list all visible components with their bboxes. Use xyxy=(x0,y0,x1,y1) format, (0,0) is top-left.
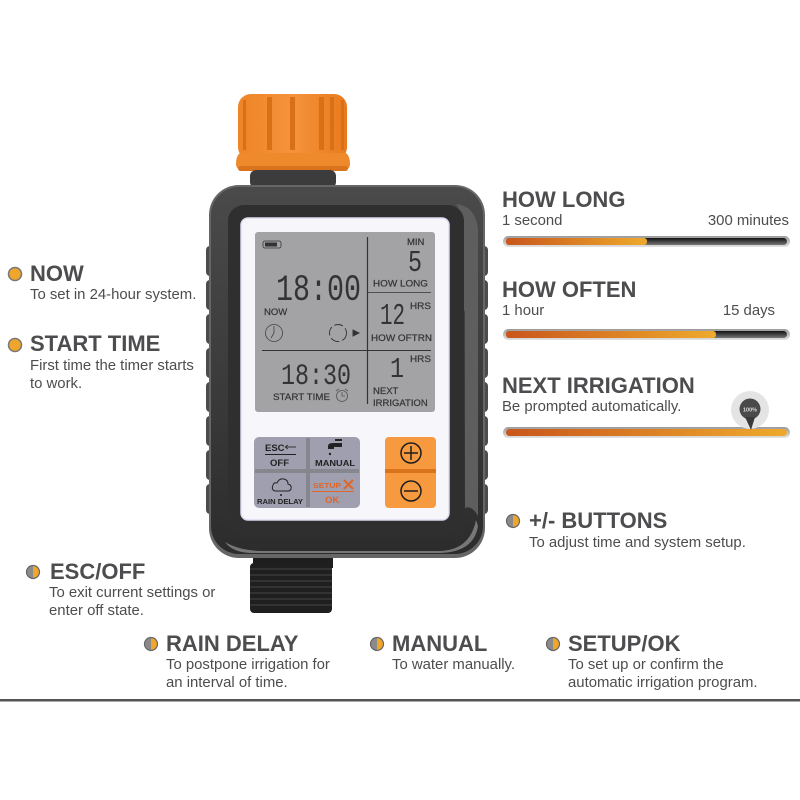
now description: To set in 24-hour system. xyxy=(30,287,196,303)
bullet xyxy=(370,638,384,650)
setup ok heading: SETUP/OK xyxy=(568,631,681,656)
setup ok button: OK xyxy=(325,495,339,506)
setup ok description: automatic irrigation program. xyxy=(568,675,758,691)
esc off description: To exit current settings or xyxy=(49,585,215,601)
callout: manual xyxy=(370,631,515,673)
hrs label 2: HRS xyxy=(410,354,431,365)
rain delay button: RAIN DELAY xyxy=(257,497,303,506)
bullet xyxy=(26,566,40,578)
bullet xyxy=(144,638,158,650)
panel: how long xyxy=(502,187,790,247)
how long range max: 300 minutes xyxy=(708,213,789,229)
next irrigation description: Be prompted automatically. xyxy=(502,399,681,415)
minus icon xyxy=(401,481,421,501)
min label: MIN xyxy=(407,237,425,248)
side grips xyxy=(206,246,488,514)
next irrigation digit: 1 xyxy=(390,353,404,386)
esc off heading: ESC/OFF xyxy=(50,559,145,584)
how often range max: 15 days xyxy=(723,303,775,319)
rain delay description: To postpone irrigation for xyxy=(166,657,330,673)
start time heading: START TIME xyxy=(30,331,160,356)
battery icon xyxy=(263,241,281,248)
device: irrigation timer xyxy=(206,94,488,613)
how often bar xyxy=(503,329,790,340)
esc off button: OFF xyxy=(270,458,289,469)
plus minus heading: +/- BUTTONS xyxy=(529,508,667,533)
start time label: START TIME xyxy=(273,392,330,403)
how long bar xyxy=(503,236,790,247)
esc off description: enter off state. xyxy=(49,603,144,619)
hrs label: HRS xyxy=(410,301,431,312)
callout: start time xyxy=(8,331,194,392)
orange cap xyxy=(236,94,350,171)
progress pin 100%: 100% xyxy=(743,408,757,414)
how often range min: 1 hour xyxy=(502,303,544,319)
how long label: HOW LONG xyxy=(373,278,428,290)
alarm icon xyxy=(336,389,348,402)
threaded outlet xyxy=(250,552,333,613)
cycle icon xyxy=(330,324,359,342)
start time description: to work. xyxy=(30,376,82,392)
start time description: First time the timer starts xyxy=(30,358,194,374)
current time digits: 18:00 xyxy=(276,270,361,312)
setup ok description: To set up or confirm the xyxy=(568,657,724,673)
now heading: NOW xyxy=(30,261,84,286)
progress pin 100% xyxy=(731,391,769,430)
bullet xyxy=(8,268,22,280)
panel: how often xyxy=(502,277,790,340)
panel: next irrigation xyxy=(502,373,790,438)
dark neck xyxy=(250,170,336,188)
manual description: To water manually. xyxy=(392,657,515,673)
setup ok button xyxy=(312,480,354,506)
white face plate xyxy=(241,218,449,520)
function button pad xyxy=(254,437,360,508)
setup ok button: SETUP xyxy=(313,481,341,490)
clock icon xyxy=(266,324,282,342)
callout: rain delay xyxy=(144,631,330,691)
rain delay description: an interval of time. xyxy=(166,675,288,691)
plus and minus buttons xyxy=(385,437,436,508)
how long heading: HOW LONG xyxy=(502,187,625,212)
how long range min: 1 second xyxy=(502,213,562,229)
plus icon xyxy=(401,443,421,463)
esc off button: ESC xyxy=(265,443,285,454)
manual heading: MANUAL xyxy=(392,631,487,656)
bullet xyxy=(8,338,22,352)
LCD screen xyxy=(255,232,435,412)
how often heading: HOW OFTEN xyxy=(502,277,636,302)
next irrigation label: NEXT xyxy=(373,386,399,397)
how long digit: 5 xyxy=(408,246,422,281)
callout: plus minus buttons xyxy=(506,508,746,551)
next irrigation bar xyxy=(503,427,790,438)
next irrigation label: IRRIGATION xyxy=(373,398,428,409)
next irrigation heading: NEXT IRRIGATION xyxy=(502,373,695,398)
bullet xyxy=(506,514,520,528)
how often digits: 12 xyxy=(380,299,405,334)
esc off button xyxy=(265,443,296,469)
start time digits: 18:30 xyxy=(281,360,351,394)
callout: esc off xyxy=(26,559,215,619)
now label: NOW xyxy=(264,307,287,318)
plus minus description: To adjust time and system setup. xyxy=(529,535,746,551)
rain delay heading: RAIN DELAY xyxy=(166,631,299,656)
manual button: MANUAL xyxy=(315,458,355,468)
callout: now xyxy=(8,261,196,303)
housing xyxy=(209,185,485,558)
callout: setup ok xyxy=(546,631,758,691)
how often label: HOW OFTRN xyxy=(371,333,432,344)
bullet xyxy=(546,638,560,650)
